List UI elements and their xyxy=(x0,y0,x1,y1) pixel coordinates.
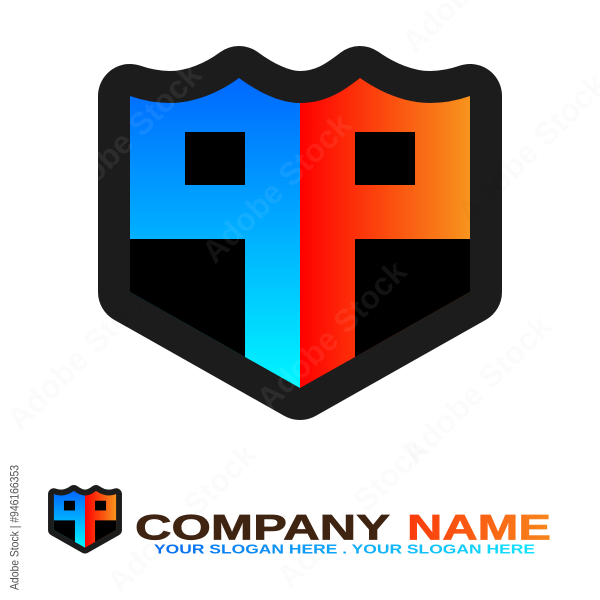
watermark: Adobe Stock xyxy=(44,56,208,220)
watermark: Adobe Stock xyxy=(0,273,163,437)
word: name: NAME xyxy=(407,508,551,548)
watermark: Adobe Stock xyxy=(249,253,413,417)
small logo icon xyxy=(54,491,116,548)
watermark: Adobe Stock xyxy=(99,436,263,600)
slogan: YOUR SLOGAN HERE . YOUR SLOGAN HERE xyxy=(154,542,535,556)
shield dark outline xyxy=(130,78,470,388)
right red-orange half xyxy=(300,78,470,388)
left window xyxy=(185,132,245,185)
watermark: Adobe Stock xyxy=(269,431,433,595)
main shield emblem xyxy=(130,78,470,388)
word: company: COMPANY xyxy=(135,508,390,548)
right window xyxy=(355,132,415,185)
watermark: Adobe Stock xyxy=(194,106,358,270)
watermark: Adobe Stock xyxy=(394,308,558,472)
left lower black block xyxy=(130,239,245,357)
right lower black block xyxy=(355,239,470,357)
stock id vertical label: Adobe Stock | #946166353 xyxy=(8,465,22,590)
left blue half xyxy=(130,78,300,388)
company name wordmark xyxy=(135,508,551,548)
